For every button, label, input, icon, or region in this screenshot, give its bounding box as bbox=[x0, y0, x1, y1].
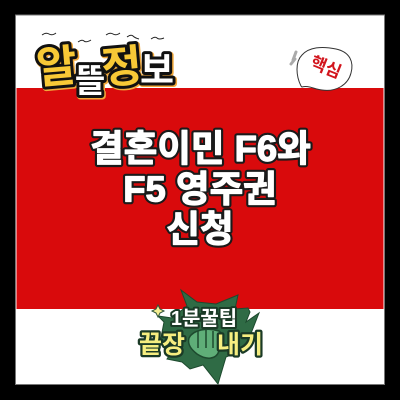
icon: fist bbox=[189, 329, 223, 358]
logo: 알뜰정보: 뜰 bbox=[75, 62, 105, 99]
title: F5 영주권 bbox=[123, 168, 277, 210]
title: 결혼이민 F6와 bbox=[90, 128, 311, 169]
icon: green burst bbox=[158, 290, 259, 384]
logo: 알뜰정보 bbox=[34, 33, 175, 100]
title: F5 영주권 bbox=[123, 168, 277, 210]
icon: sparkle bbox=[152, 305, 164, 317]
badge word: 끝장: 끝장 bbox=[139, 331, 185, 359]
title bbox=[90, 128, 311, 250]
logo: 알뜰정보: 알 bbox=[34, 41, 79, 94]
badge line: 1분꿀팁: 1분꿀팁 bbox=[171, 307, 237, 330]
logo: 알뜰정보: 정 bbox=[99, 41, 144, 94]
logo: 알뜰정보: 보 bbox=[140, 50, 174, 91]
badge word: 내기: 내기 bbox=[217, 331, 263, 359]
logo: 알뜰정보: 뜰 bbox=[76, 63, 106, 100]
panel: red band bbox=[16, 88, 384, 309]
title: 결혼이민 F6와 bbox=[90, 128, 311, 169]
icon: speech bubble 핵심: 핵심 bbox=[308, 53, 344, 82]
title: 신청 bbox=[166, 208, 234, 250]
icon: speech bubble 핵심 bbox=[291, 47, 352, 90]
logo: 알뜰정보: 알 bbox=[35, 42, 80, 95]
icon: sparkle marks bbox=[42, 33, 164, 42]
title: 신청 bbox=[166, 208, 234, 250]
logo: 알뜰정보: 보 bbox=[141, 51, 175, 92]
badge: 1분꿀팁 끝장내기 bbox=[139, 290, 263, 384]
logo: 알뜰정보: 정 bbox=[100, 42, 145, 95]
